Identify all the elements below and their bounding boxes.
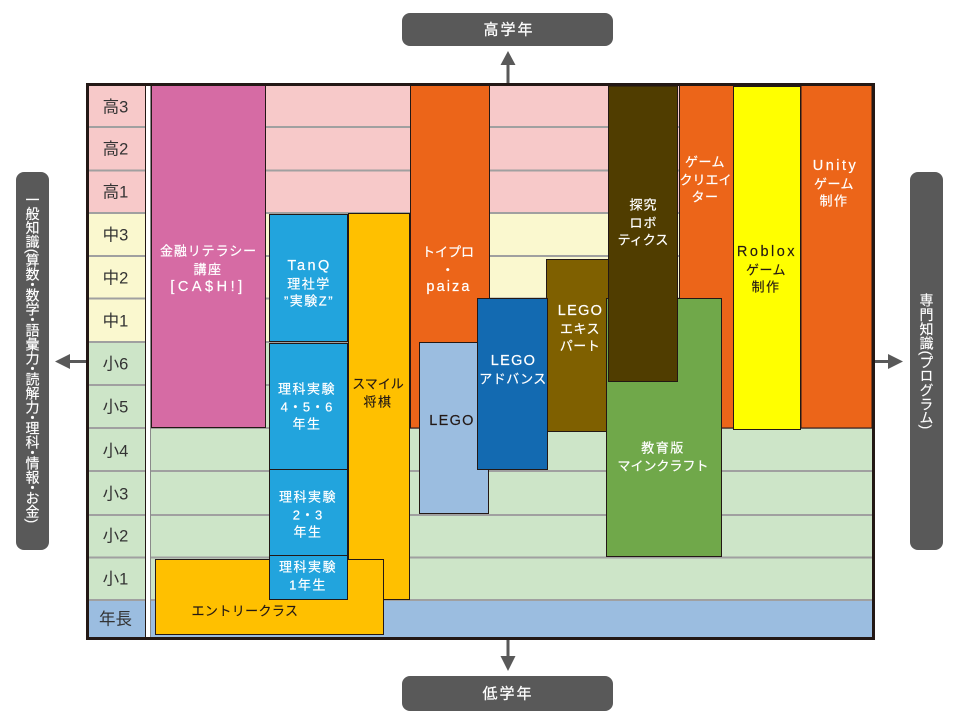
course: science 4-6: 年生 — [292, 416, 322, 432]
arrow: down — [500, 639, 516, 671]
grade labels: 小6 — [103, 354, 128, 374]
course: smile shogi — [348, 214, 410, 600]
course: LEGO expert — [546, 260, 616, 432]
course: Roblox: Roblox — [737, 244, 797, 260]
course: smile shogi: スマイル — [352, 376, 404, 392]
course: LEGO advance — [478, 298, 548, 470]
grade labels — [99, 98, 132, 628]
pill: upper grades: 高学年 — [483, 22, 535, 38]
course: inquiry robotics: ティクス — [618, 232, 668, 248]
course: science 2-3 — [270, 470, 348, 556]
course: science 4-6: 4・5・6 — [281, 400, 333, 414]
course: Unity: 制作 — [819, 194, 849, 208]
arrow: up — [500, 51, 516, 84]
course: LEGO: LEGO — [429, 413, 475, 429]
course: Unity — [801, 85, 872, 428]
course: LEGO expert: パート — [560, 338, 600, 354]
course: TanQ: ”実験Z” — [284, 294, 334, 308]
course: science 2-3: 2・3 — [293, 508, 323, 522]
course: Roblox — [734, 86, 800, 430]
course: LEGO — [420, 342, 488, 514]
pill: specialist knowledge: 専門知識(プログラム) — [918, 293, 934, 430]
grade labels: 年長 — [99, 610, 132, 628]
grade labels: 小3 — [103, 484, 128, 504]
course: science 2-3: 年生 — [293, 524, 323, 540]
pill: lower grades: 低学年 — [482, 686, 534, 702]
grade labels: 小5 — [103, 398, 128, 416]
course: science 1: 理科実験 — [279, 560, 337, 574]
course: financial literacy — [152, 85, 266, 428]
course: Roblox: ゲーム — [746, 262, 786, 278]
course: LEGO expert: LEGO — [558, 303, 603, 319]
course: TanQ: TanQ — [287, 258, 332, 274]
pill: upper grades — [402, 13, 613, 46]
grade labels: 小4 — [103, 442, 128, 460]
pill: general knowledge — [16, 172, 49, 550]
course: TanQ — [270, 214, 348, 342]
course: entry class — [156, 560, 384, 634]
grade labels: 中1 — [103, 312, 128, 330]
course: education Minecraft: マインクラフト — [617, 458, 709, 474]
pill: lower grades — [402, 676, 613, 711]
course: smile shogi: 将棋 — [363, 394, 393, 410]
grade labels: 高2 — [103, 140, 128, 158]
grade labels: 小1 — [103, 570, 128, 588]
course: financial literacy: [CA$H!] — [170, 279, 246, 295]
course: science 4-6: 理科実験 — [278, 382, 336, 396]
course: LEGO advance: LEGO — [491, 353, 536, 369]
course: LEGO advance: アドバンス — [479, 372, 547, 386]
course: inquiry robotics: 探究 — [629, 198, 658, 212]
course: Roblox: 制作 — [751, 280, 781, 294]
grade labels: 中2 — [103, 268, 128, 288]
course: inquiry robotics — [608, 86, 678, 382]
course: science 4-6 — [270, 344, 348, 470]
course: typing and paiza — [410, 85, 490, 428]
course: typing and paiza: paiza — [426, 279, 472, 295]
course: typing and paiza: トイプロ — [422, 244, 474, 260]
course: entry class: エントリークラス — [192, 604, 298, 618]
pill: specialist knowledge — [910, 172, 943, 550]
course: science 1 — [270, 556, 348, 600]
course: LEGO expert: エキス — [560, 322, 600, 336]
grade bands — [89, 85, 872, 637]
course: Unity: ゲーム — [814, 176, 854, 192]
course: education Minecraft — [606, 298, 722, 556]
course: financial literacy: 金融リテラシー — [160, 244, 257, 258]
course: financial literacy: 講座 — [193, 262, 223, 277]
course: Unity: Unity — [813, 158, 858, 174]
course: typing and paiza: ・ — [441, 262, 455, 278]
grade labels: 中3 — [103, 226, 128, 244]
arrow: right — [874, 354, 903, 369]
pill: general knowledge: 一般知識(算数・数学・語彙力・読解力・理科・情報・お金) — [24, 193, 40, 523]
course: TanQ: 理社学 — [287, 276, 331, 292]
grade labels: 高1 — [103, 182, 128, 202]
course: science 1: 1年生 — [289, 578, 327, 592]
course: game creator: クリエイ — [679, 172, 732, 188]
course: inquiry robotics: ロボ — [629, 216, 658, 230]
chart frame — [88, 84, 874, 638]
course: game creator — [679, 85, 734, 428]
course: game creator: ター — [691, 190, 719, 204]
course: education Minecraft: 教育版 — [641, 440, 685, 456]
course: game creator: ゲーム — [685, 154, 725, 170]
grade labels: 高3 — [103, 98, 128, 116]
grade labels: 小2 — [103, 526, 128, 546]
arrow: left — [55, 354, 87, 369]
course: science 2-3: 理科実験 — [279, 490, 337, 504]
